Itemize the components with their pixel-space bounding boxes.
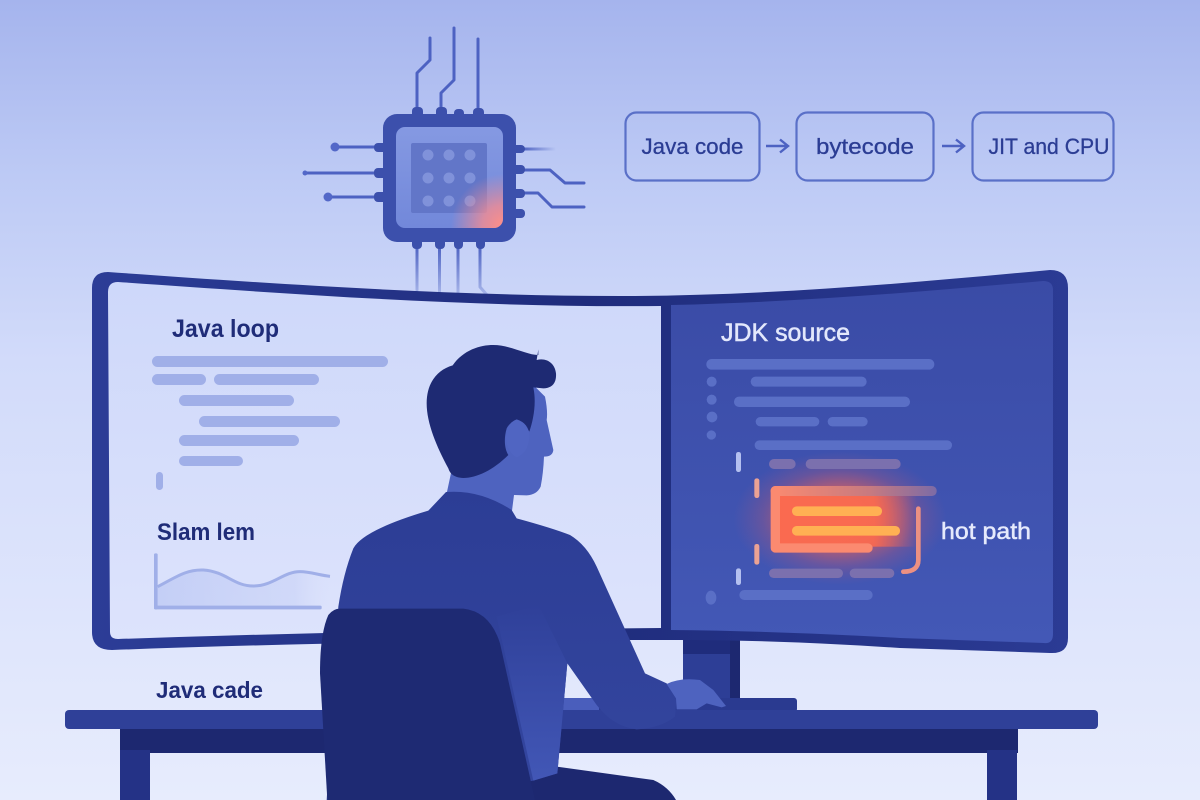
trace end nodes: [302, 142, 340, 202]
monitor: [92, 270, 1068, 653]
heading: Java loop: Java loop: [172, 315, 279, 343]
box: JIT and CPU: JIT and CPU: [988, 134, 1110, 159]
chip hot spot: [454, 177, 503, 228]
neck and face: [447, 385, 553, 513]
chip pins: [374, 107, 525, 249]
label: Java cade: Java cade: [156, 677, 263, 703]
fading trace: [522, 148, 556, 150]
sleeve fold: [497, 605, 567, 781]
hand: [667, 679, 726, 709]
code lines: [152, 356, 388, 490]
hot path bracket: [903, 509, 918, 572]
person at desk: [320, 345, 726, 800]
chair back: [320, 609, 535, 800]
right screen: [671, 281, 1053, 643]
desk: [65, 710, 1098, 800]
heading: JDK source: JDK source: [721, 319, 850, 347]
hot path glow: [733, 452, 947, 585]
heading: Slam lem: Slam lem: [157, 519, 255, 546]
chip body: [383, 114, 516, 242]
gutter ticks: [736, 452, 759, 585]
box: JIT and CPU: [972, 112, 1114, 180]
label: hot path: hot path: [941, 518, 1031, 544]
line chart: [154, 553, 330, 609]
flow diagram: Java code to bytecode to JIT and CPU: [626, 112, 1114, 180]
dim code lines near glow: [769, 459, 901, 578]
box: Java code: Java code: [642, 134, 744, 159]
left screen: [108, 282, 661, 639]
monitor bezel: [92, 270, 1068, 653]
hair: [427, 345, 556, 478]
legs: [487, 763, 676, 800]
code panel: [706, 359, 952, 605]
box: bytecode: [796, 112, 934, 180]
chip inner die: [396, 127, 503, 228]
code lines: [706, 359, 952, 605]
chip core grid: [411, 143, 487, 213]
icon: CPU chip with circuit traces: [302, 28, 584, 295]
monitor stand: [563, 636, 797, 712]
torso and arm: [327, 492, 677, 800]
box: bytecode: bytecode: [816, 134, 914, 159]
ear: [506, 419, 529, 457]
arrow: [766, 140, 788, 152]
chip traces: [305, 28, 584, 295]
box: Java code: [626, 112, 760, 180]
arrow: [942, 140, 964, 152]
hot path highlight box: [771, 486, 937, 553]
